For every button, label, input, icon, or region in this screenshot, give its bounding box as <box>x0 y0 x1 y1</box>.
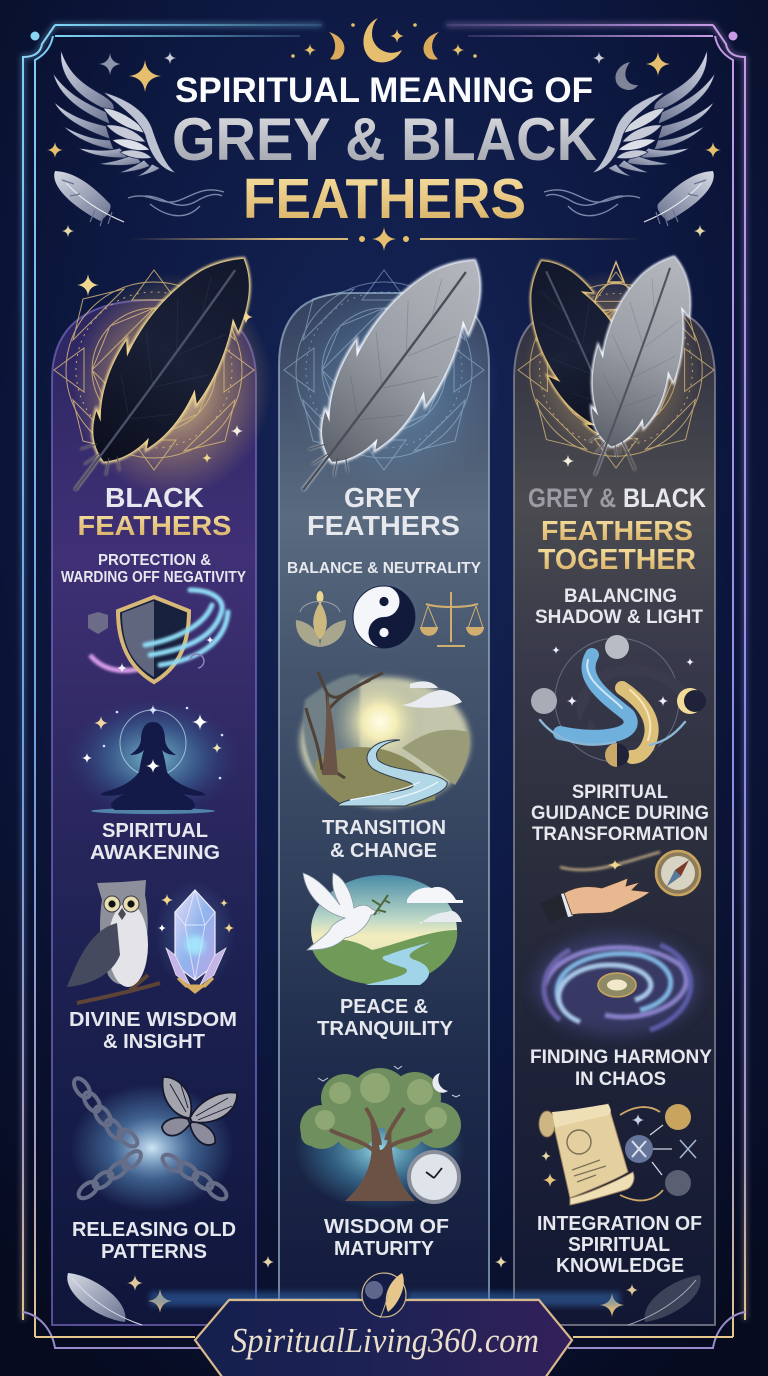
icon: bottom right feather and stars <box>600 1275 701 1325</box>
text: divine wisdom <box>69 1009 237 1053</box>
title <box>172 71 597 231</box>
icon: left wing <box>53 50 176 177</box>
panel: grey feathers <box>265 234 513 1325</box>
icon: dove and peaceful river <box>303 873 463 985</box>
text: releasing old patterns: PATTERNS <box>101 1240 207 1263</box>
text: wisdom of maturity: WISDOM OF <box>324 1215 449 1238</box>
text: protection: WARDING OFF NEGATIVITY <box>61 569 247 586</box>
icon: gold mandala with glow <box>54 270 272 497</box>
text: protection <box>61 552 247 586</box>
column panel background <box>514 310 715 1325</box>
text: releasing old patterns <box>72 1218 236 1263</box>
title divider with star <box>130 227 640 251</box>
icon: path and river landscape <box>300 672 470 807</box>
icon: right small feather <box>644 171 714 226</box>
text: wisdom of maturity <box>324 1215 449 1260</box>
text: transition and change: TRANSITION <box>322 817 446 839</box>
column panel background <box>279 293 489 1325</box>
text: balancing shadow and light: SHADOW & LIGHT <box>535 607 703 628</box>
title: FEATHERS <box>243 167 526 231</box>
icon: blue mandala with glow <box>284 270 500 490</box>
icon: scales <box>421 592 483 646</box>
heading: black feathers: FEATHERS <box>78 510 232 541</box>
text: integration of spiritual knowledge: SPIRITUAL <box>568 1233 670 1256</box>
icon: scroll with symbols <box>539 1104 696 1205</box>
icon: meditating figure <box>65 698 241 818</box>
text: finding harmony in chaos <box>530 1046 712 1090</box>
icon: yin yang <box>348 581 420 653</box>
icon: footer logo <box>362 1273 406 1318</box>
heading: grey feathers: FEATHERS <box>307 510 460 541</box>
icon: hand with compass <box>540 851 700 923</box>
text: protection: PROTECTION & <box>98 552 211 569</box>
icon: crossed black and grey feathers <box>505 243 714 489</box>
text: transition and change: & CHANGE <box>330 840 437 862</box>
panel: black feathers <box>37 232 283 1325</box>
text: integration of spiritual knowledge: KNOWLEDGE <box>556 1254 684 1277</box>
icon: tree with clock <box>295 1066 465 1210</box>
icon: broken chains and butterfly <box>70 1076 237 1212</box>
heading: black feathers: BLACK <box>105 482 204 513</box>
heading: grey feathers <box>307 482 460 541</box>
heading: grey feathers: GREY <box>344 482 421 513</box>
text: integration of spiritual knowledge <box>537 1212 702 1277</box>
icon: owl and crystal <box>67 880 235 1003</box>
text: peace and tranquility: PEACE & <box>340 996 428 1018</box>
text: releasing old patterns: RELEASING OLD <box>72 1218 236 1241</box>
text: spiritual guidance during transformation: GUIDANCE DURING <box>531 803 709 824</box>
heading: grey and black feathers together: FEATHERS <box>541 515 693 546</box>
icon: bottom left feather and stars <box>67 1273 172 1325</box>
text: transition and change <box>322 817 446 862</box>
icon: shield with swirl <box>88 590 228 682</box>
text: spiritual awakening: AWAKENING <box>90 842 220 864</box>
icon: moon phases and stars at top <box>291 18 477 62</box>
icon: lotus <box>296 591 346 647</box>
small stars between columns <box>262 1256 507 1268</box>
text: spiritual guidance during transformation <box>531 782 709 845</box>
text: balance and neutrality: BALANCE & NEUTRALITY <box>287 560 481 577</box>
text: wisdom of maturity: MATURITY <box>334 1237 434 1260</box>
title: SPIRITUAL MEANING OF <box>175 71 593 110</box>
heading: black feathers <box>78 482 232 541</box>
text: peace and tranquility: TRANQUILITY <box>317 1018 454 1040</box>
heading: grey and black feathers together: TOGETHER <box>538 544 696 576</box>
icon: spiral galaxy <box>535 935 699 1035</box>
decorative swirl right <box>544 190 640 216</box>
text: finding harmony in chaos: IN CHAOS <box>575 1068 666 1090</box>
website url text: SpiritualLiving360.com <box>231 1321 539 1360</box>
heading: grey and black feathers together <box>528 483 706 576</box>
text: finding harmony in chaos: FINDING HARMONY <box>530 1046 712 1068</box>
icon: grey feather <box>265 234 513 518</box>
icon: black feather <box>37 232 283 517</box>
text: balancing shadow and light <box>535 586 703 628</box>
icon: gold mandala and moon <box>518 262 714 468</box>
text: peace and tranquility <box>317 996 454 1040</box>
column panel background <box>52 300 256 1325</box>
footer banner <box>150 1273 620 1376</box>
panel: grey and black feathers together <box>505 243 715 1325</box>
text: divine wisdom: & INSIGHT <box>103 1031 205 1053</box>
text: spiritual awakening <box>90 820 220 864</box>
sparkles around title <box>47 52 721 237</box>
icon: left small feather <box>54 171 124 226</box>
text: balancing shadow and light: BALANCING <box>564 586 677 607</box>
text: spiritual guidance during transformation: SPIRITUAL <box>572 782 668 803</box>
decorative swirl left <box>128 190 224 216</box>
text: spiritual awakening: SPIRITUAL <box>102 820 208 842</box>
icon: interwoven knot with moons <box>531 635 706 767</box>
title: GREY & BLACK <box>172 106 597 173</box>
heading: grey and black feathers together: GREY & <box>528 483 616 513</box>
text: divine wisdom: DIVINE WISDOM <box>69 1009 237 1031</box>
text: spiritual guidance during transformation: TRANSFORMATION <box>532 824 708 845</box>
icon: right wing <box>592 50 715 177</box>
text: integration of spiritual knowledge: INTEGRATION OF <box>537 1212 702 1235</box>
heading: grey and black feathers together: BLACK <box>623 483 706 513</box>
